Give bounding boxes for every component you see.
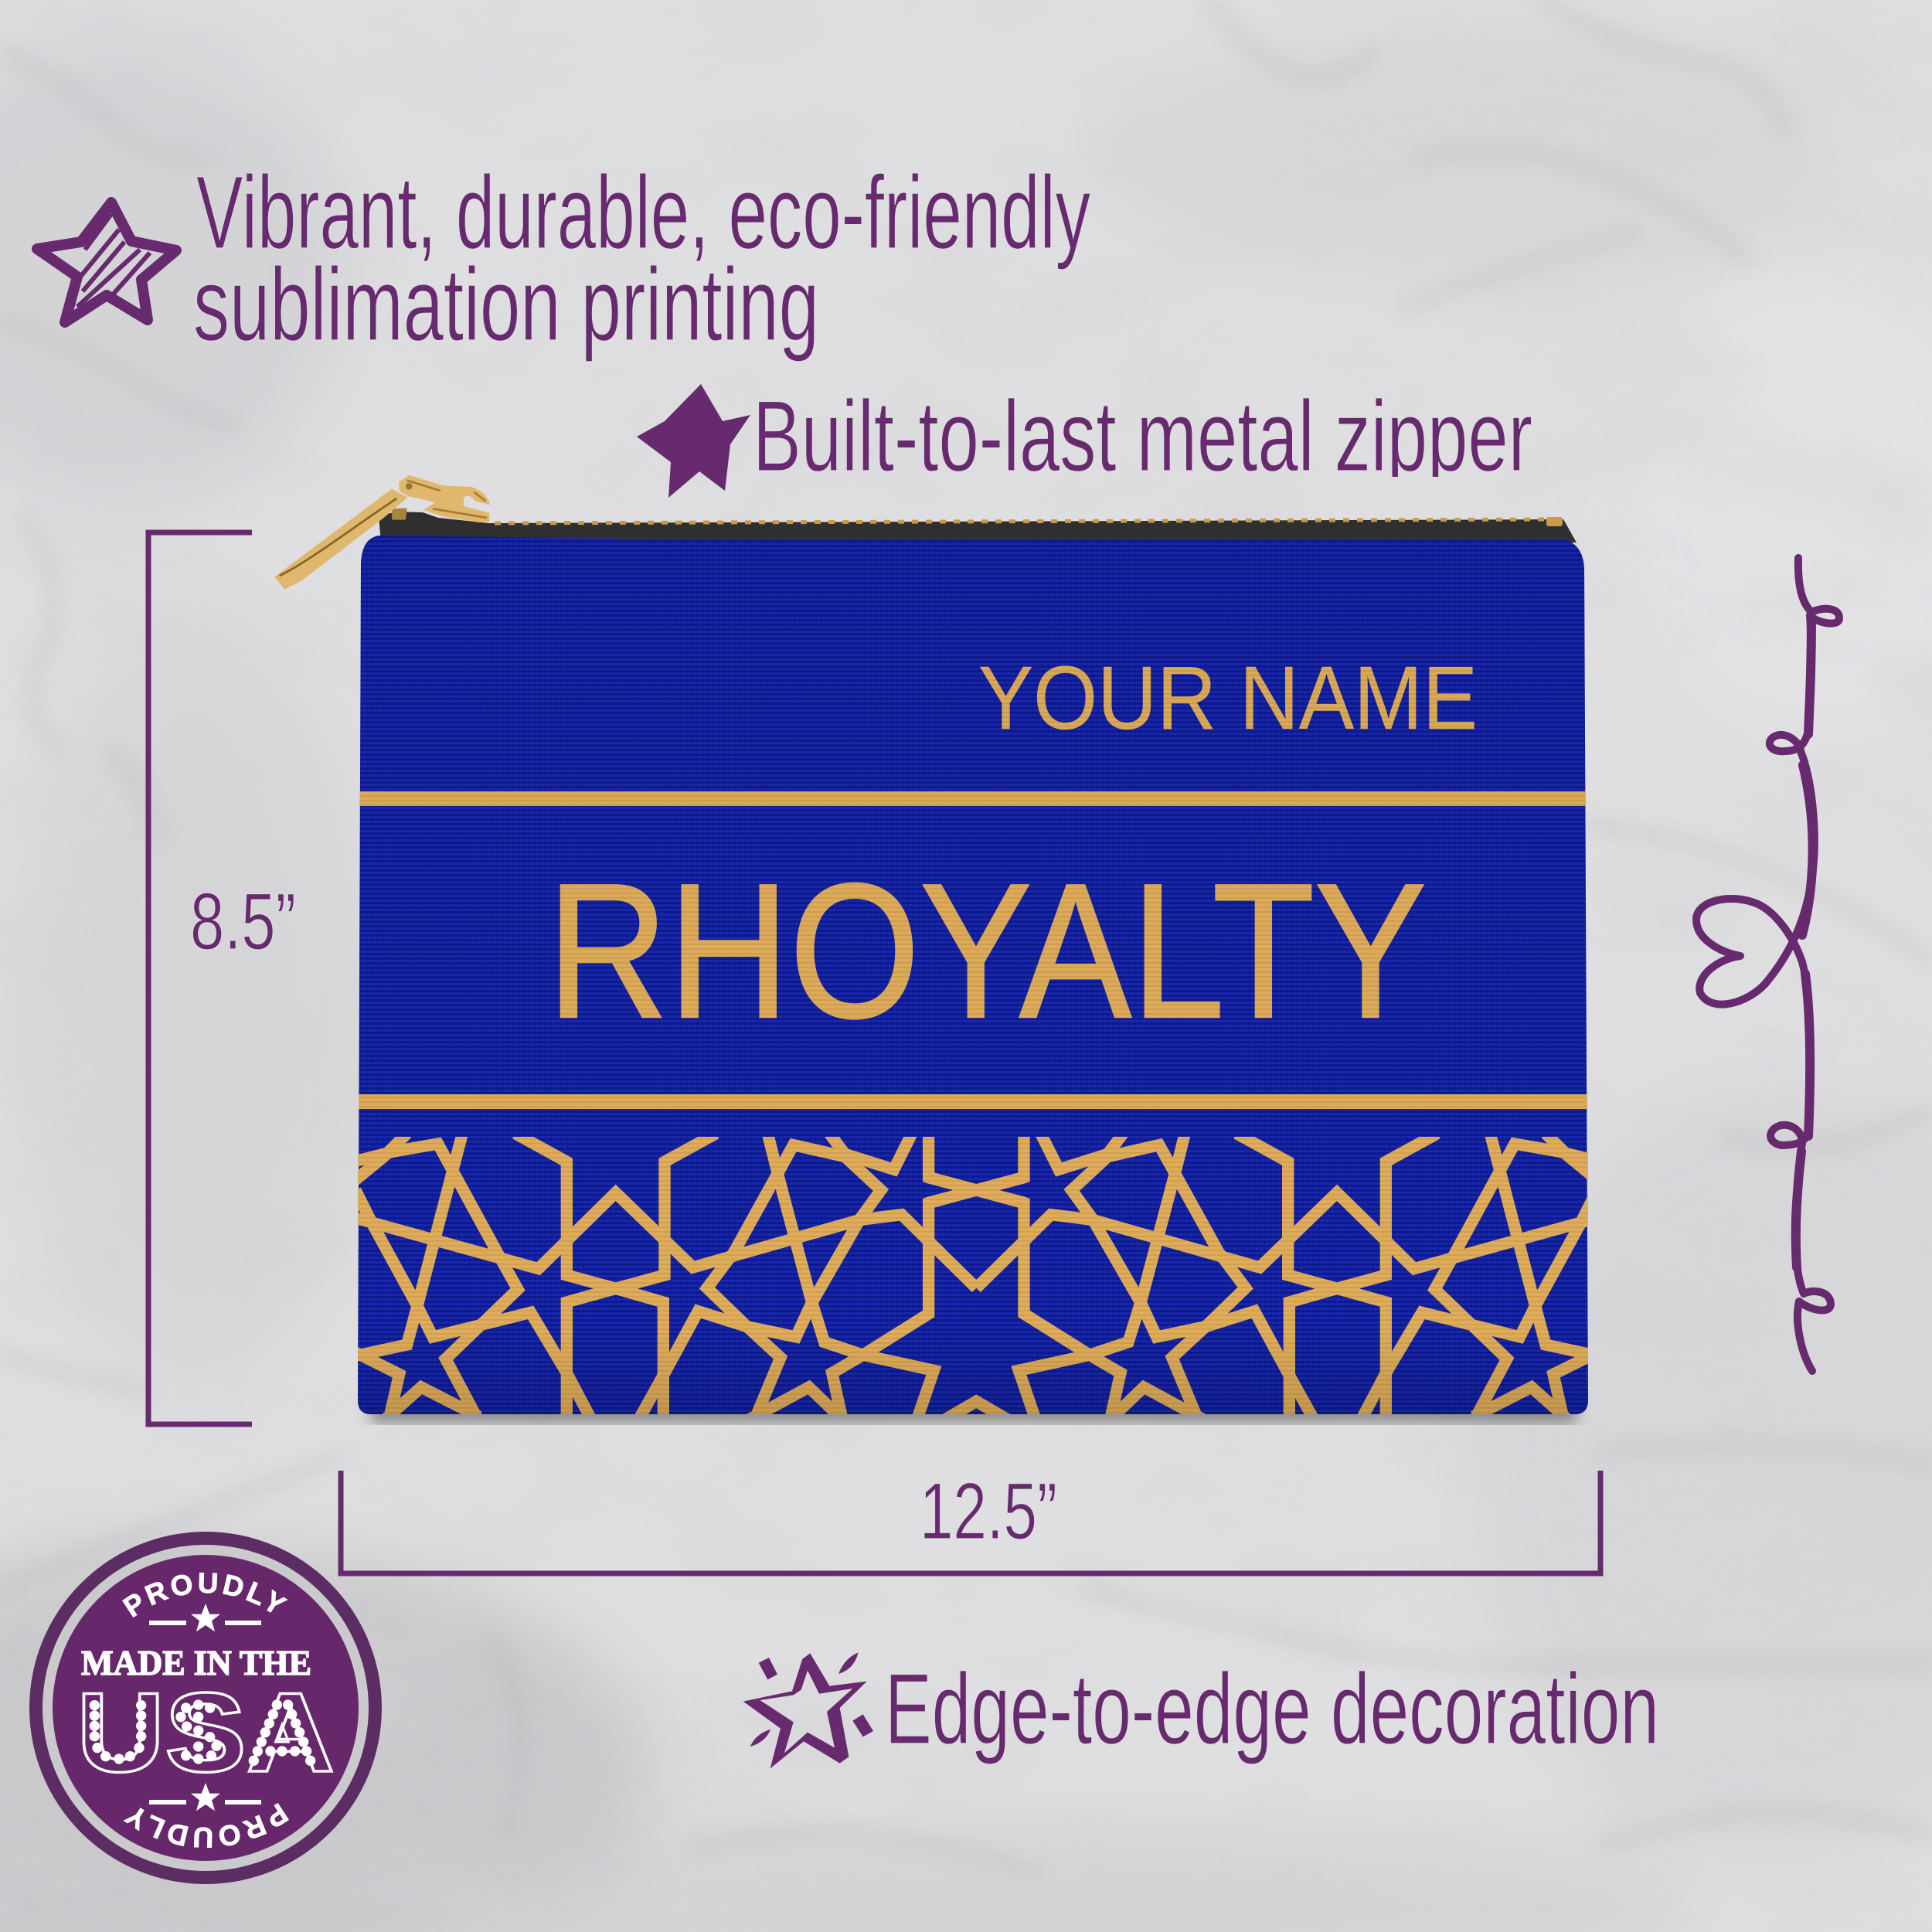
badge heading: MADE IN THE: [81, 1643, 311, 1682]
decorative vine with heart: [1696, 558, 1839, 1371]
text: sublimation printing: Vibrant, durable, eco-friendly: [196, 155, 1090, 270]
badge rings: [29, 1532, 382, 1884]
feature: edge-to-edge decoration: [743, 1652, 1659, 1768]
lower stripe: [359, 1094, 1587, 1109]
name text: YOUR NAME: [978, 648, 1478, 748]
badge bottom star divider: [149, 1783, 261, 1811]
width label: 12.5”: [920, 1467, 1057, 1556]
icon: scribbled star: [637, 384, 750, 498]
text: metal zipper: Built-to-last metal zipper: [753, 379, 1532, 492]
badge top star divider: [149, 1604, 261, 1631]
heading: metal zipper feature: [637, 379, 1532, 498]
height label: 8.5”: [190, 877, 296, 967]
zipper pull: [274, 475, 490, 590]
pouch shadow: [371, 1393, 1577, 1423]
pouch: [348, 533, 1605, 1420]
badge bottom arc text: PROUDLY: [124, 1802, 289, 1849]
badge: proudly made in the USA: [29, 1532, 382, 1884]
zipper teeth: [495, 519, 1546, 523]
badge USA bulbs: [90, 1699, 315, 1766]
canvas texture and shading: [355, 533, 1592, 1418]
width dimension bracket: [341, 1467, 1600, 1573]
badge top arc text: PROUDLY: [122, 1572, 287, 1618]
pouch body: [358, 536, 1588, 1414]
height dimension bracket: [148, 532, 296, 1424]
geometric star pattern: [348, 1134, 1605, 1420]
text: sublimation printing: sublimation printing: [193, 247, 819, 362]
zipper: [274, 475, 1577, 590]
icon: striped star: [37, 202, 176, 322]
blue canvas weave: [355, 533, 1592, 1418]
badge USA lettering: USA: [77, 1669, 335, 1795]
icon: burst star: [743, 1652, 873, 1768]
upper stripe: [360, 791, 1586, 806]
brand text: RHOYALTY: [547, 843, 1427, 1058]
zipper tape: [379, 512, 1577, 543]
zipper stop: [1546, 517, 1563, 526]
heading: sublimation printing feature: [37, 155, 1090, 362]
